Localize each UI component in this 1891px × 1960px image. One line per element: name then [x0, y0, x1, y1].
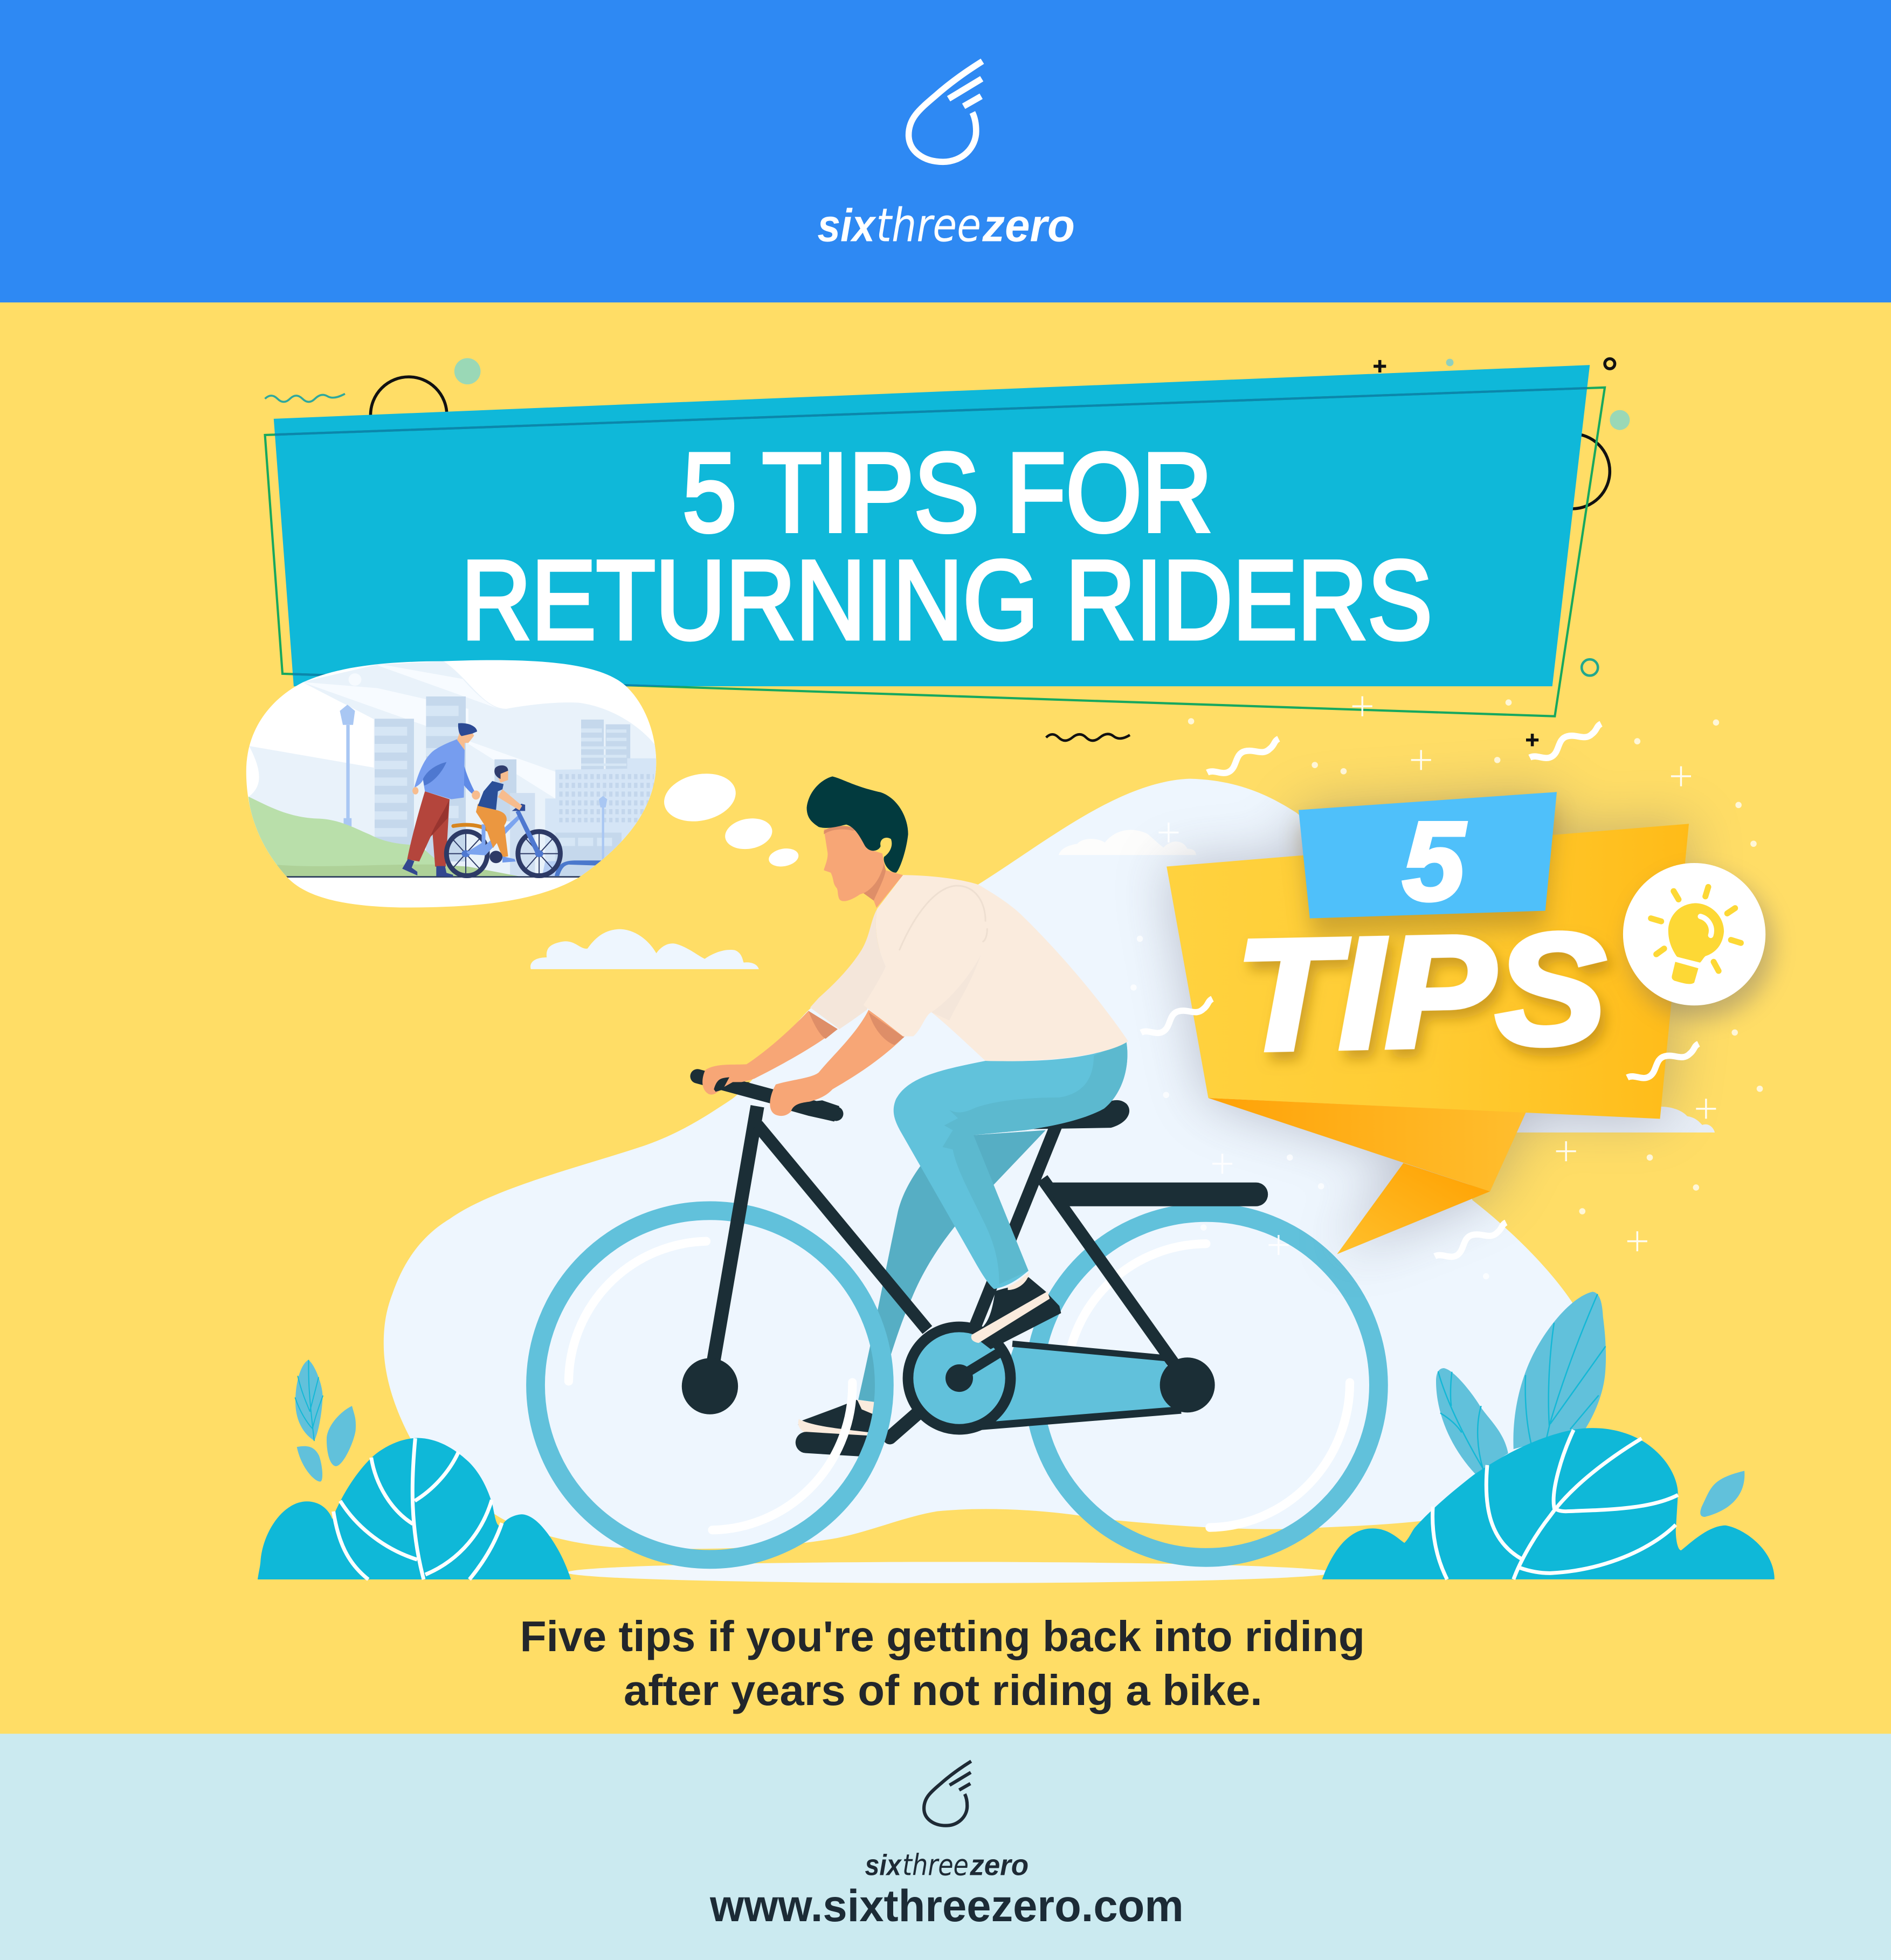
shirt [864, 875, 1128, 1061]
tall leaf [1513, 1292, 1606, 1449]
main yellow background [0, 302, 1891, 1735]
cloud: left [530, 929, 759, 969]
logo wordmark: zero [982, 200, 1075, 252]
subtitle: Five tips if you're getting back into riding [520, 1612, 1365, 1660]
grip over the far hand [714, 1077, 750, 1092]
father [464, 767, 474, 793]
bush body [258, 1438, 571, 1579]
tips ribbon badge [1167, 792, 1689, 1254]
bush veins [334, 1438, 502, 1579]
bench [543, 861, 556, 876]
cyclist illustration [536, 776, 1378, 1559]
header logo [817, 61, 1075, 253]
sparkle dots [1130, 699, 1763, 1279]
subtitle [520, 1612, 1365, 1714]
front shoe [972, 1277, 1061, 1349]
logo icon: wing drop [909, 61, 982, 162]
footer logo [865, 1761, 1029, 1882]
header band [0, 0, 1891, 302]
hubs and chainring [682, 1327, 1215, 1430]
rear wheel [536, 1211, 884, 1559]
footer band [0, 1734, 1891, 1960]
ribbon fold [1209, 1098, 1526, 1191]
buildings [375, 719, 414, 847]
footer wordmark: six [865, 1848, 902, 1881]
far sleeve [810, 909, 886, 1029]
cloud: right behind ribbon [1506, 1100, 1715, 1133]
TIPS word: TIPS [1234, 900, 1609, 1083]
lamp posts [340, 705, 607, 861]
main banner shape [265, 365, 1605, 716]
title [461, 430, 1432, 663]
website url: www.sixthreezero.com [709, 1880, 1184, 1931]
white squiggles [1141, 724, 1699, 1257]
grass [249, 797, 520, 877]
ribbon tail [1337, 1163, 1490, 1254]
light background blob [384, 779, 1584, 1549]
decoration behind banner [265, 358, 1630, 746]
ribbon main panel [1167, 824, 1689, 1119]
light bulb badge [1623, 863, 1773, 1019]
footer wordmark: zero [969, 1848, 1029, 1881]
logo wordmark: six [817, 200, 877, 252]
logo wordmark [817, 199, 1075, 253]
ground line [283, 876, 585, 878]
number 5: 5 [1402, 799, 1466, 924]
title: RETURNING RIDERS [461, 537, 1432, 663]
upper leaf [295, 1360, 322, 1440]
far leg and shoe [798, 1130, 1046, 1438]
thought dots [660, 768, 800, 869]
near leg and trousers [894, 1042, 1127, 1289]
sparkle plus marks [1158, 696, 1716, 1255]
front wheel [1033, 1212, 1378, 1557]
title: 5 TIPS FOR [682, 430, 1212, 556]
number tab [1299, 792, 1557, 919]
hair [807, 776, 908, 873]
right bush with leaves [1322, 1292, 1775, 1579]
bicycle and boy [453, 825, 487, 830]
left bush with leaves [258, 1360, 571, 1579]
chain guard [988, 1344, 1181, 1425]
drifting leaf [1700, 1471, 1744, 1517]
far arm [702, 1011, 838, 1095]
bicycle frame [711, 1106, 1181, 1426]
rider body [702, 776, 1128, 1349]
bubble shape [246, 660, 656, 908]
neck [874, 870, 903, 908]
footer logo icon [924, 1761, 971, 1826]
rear pedal and crank [806, 1377, 958, 1446]
thought bubble scene [246, 660, 658, 908]
footer wordmark [865, 1847, 1029, 1882]
number tab shadow [1300, 806, 1556, 937]
saddle [1025, 1100, 1129, 1129]
footer wordmark: three [902, 1847, 969, 1882]
side leaves [327, 1406, 356, 1466]
subtitle: after years of not riding a bike. [624, 1666, 1262, 1714]
bubble illustration [249, 661, 658, 878]
near arm [770, 1010, 905, 1116]
logo wordmark: three [876, 199, 981, 253]
rack bar [1047, 1183, 1268, 1206]
icon: light bulb [1651, 887, 1741, 984]
handlebar [698, 1076, 836, 1114]
bush body [1322, 1428, 1775, 1579]
soft ribbon shadow [1166, 792, 1688, 1254]
small leaf [1436, 1368, 1508, 1474]
ground highlight [568, 1562, 1333, 1583]
face [824, 827, 884, 901]
banner outline [265, 388, 1605, 716]
cloud: upper right [1059, 830, 1196, 855]
bush veins [1433, 1430, 1678, 1579]
